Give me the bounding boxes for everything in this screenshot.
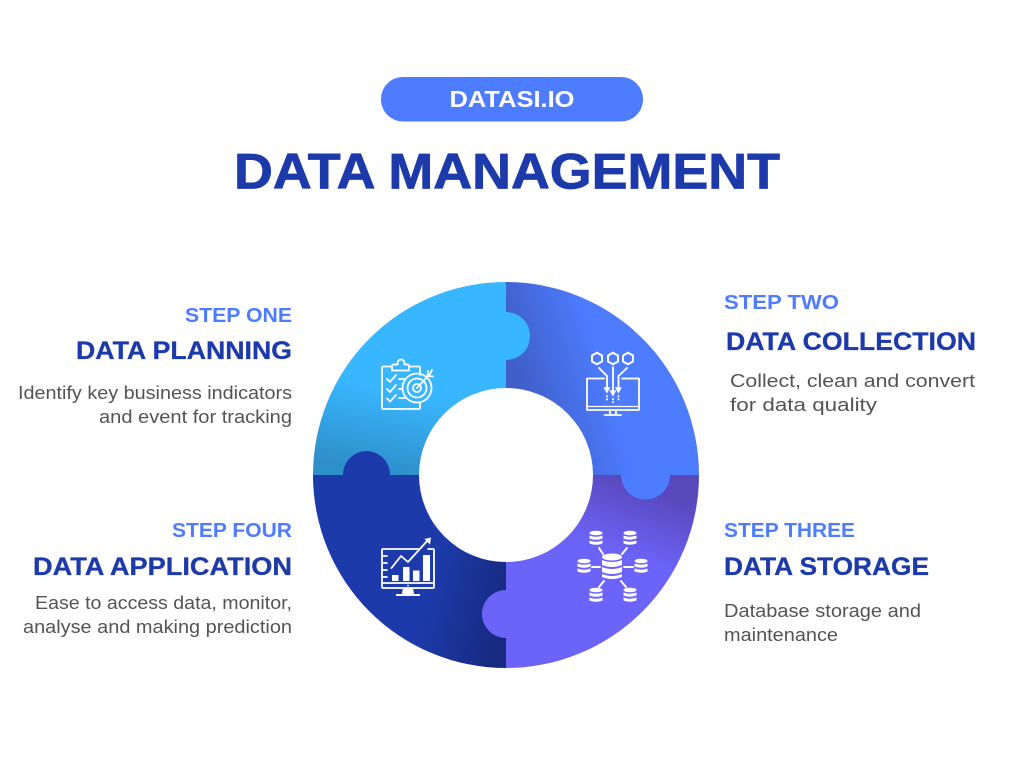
knob: step one tab [506,312,530,360]
segment: step three puzzle piece [506,475,699,668]
heading: data storage: DATA STORAGE [724,553,929,581]
text block: step two [724,292,976,415]
icon: data funnel into monitor [587,353,639,415]
text block: step one [18,305,292,427]
icon: analytics monitor [382,538,434,596]
description: data planning: Identify key business indicators [18,383,292,403]
description: data storage: maintenance [724,625,838,645]
text block: step four [23,520,293,637]
puzzle ring chart [313,282,699,668]
segment: step four puzzle piece [313,475,506,668]
text block: step three [724,520,929,645]
badge: DATASI.IO [381,77,643,122]
knob: step three tab [482,590,506,638]
description: data application [23,593,292,637]
icon: database network [578,531,648,602]
description: data collection: for data quality [730,395,877,415]
label: step four: STEP FOUR [172,520,293,542]
description: data collection [730,371,975,415]
description: data collection: Collect, clean and convert [730,371,975,391]
heading: data application: DATA APPLICATION [33,553,292,581]
label: step two: STEP TWO [724,292,839,314]
heading: data planning: DATA PLANNING [76,337,292,365]
description: data application: analyse and making prediction [23,617,292,637]
segment: step one puzzle piece [313,282,506,475]
description: data storage [724,601,921,645]
title: DATA MANAGEMENT [234,144,780,200]
description: data planning [18,383,292,427]
label: step three: STEP THREE [724,520,855,542]
description: data application: Ease to access data, monitor, [35,593,292,613]
label: step one: STEP ONE [185,305,292,327]
description: data storage: Database storage and [724,601,921,621]
segment: step two puzzle piece [506,282,699,475]
icon: clipboard with target [382,360,433,409]
knob: step two tab [621,475,670,499]
knob: step four tab [343,451,390,475]
description: data planning: and event for tracking [99,407,292,427]
badge: DATASI.IO: DATASI.IO [450,86,574,112]
heading: data collection: DATA COLLECTION [726,328,976,356]
